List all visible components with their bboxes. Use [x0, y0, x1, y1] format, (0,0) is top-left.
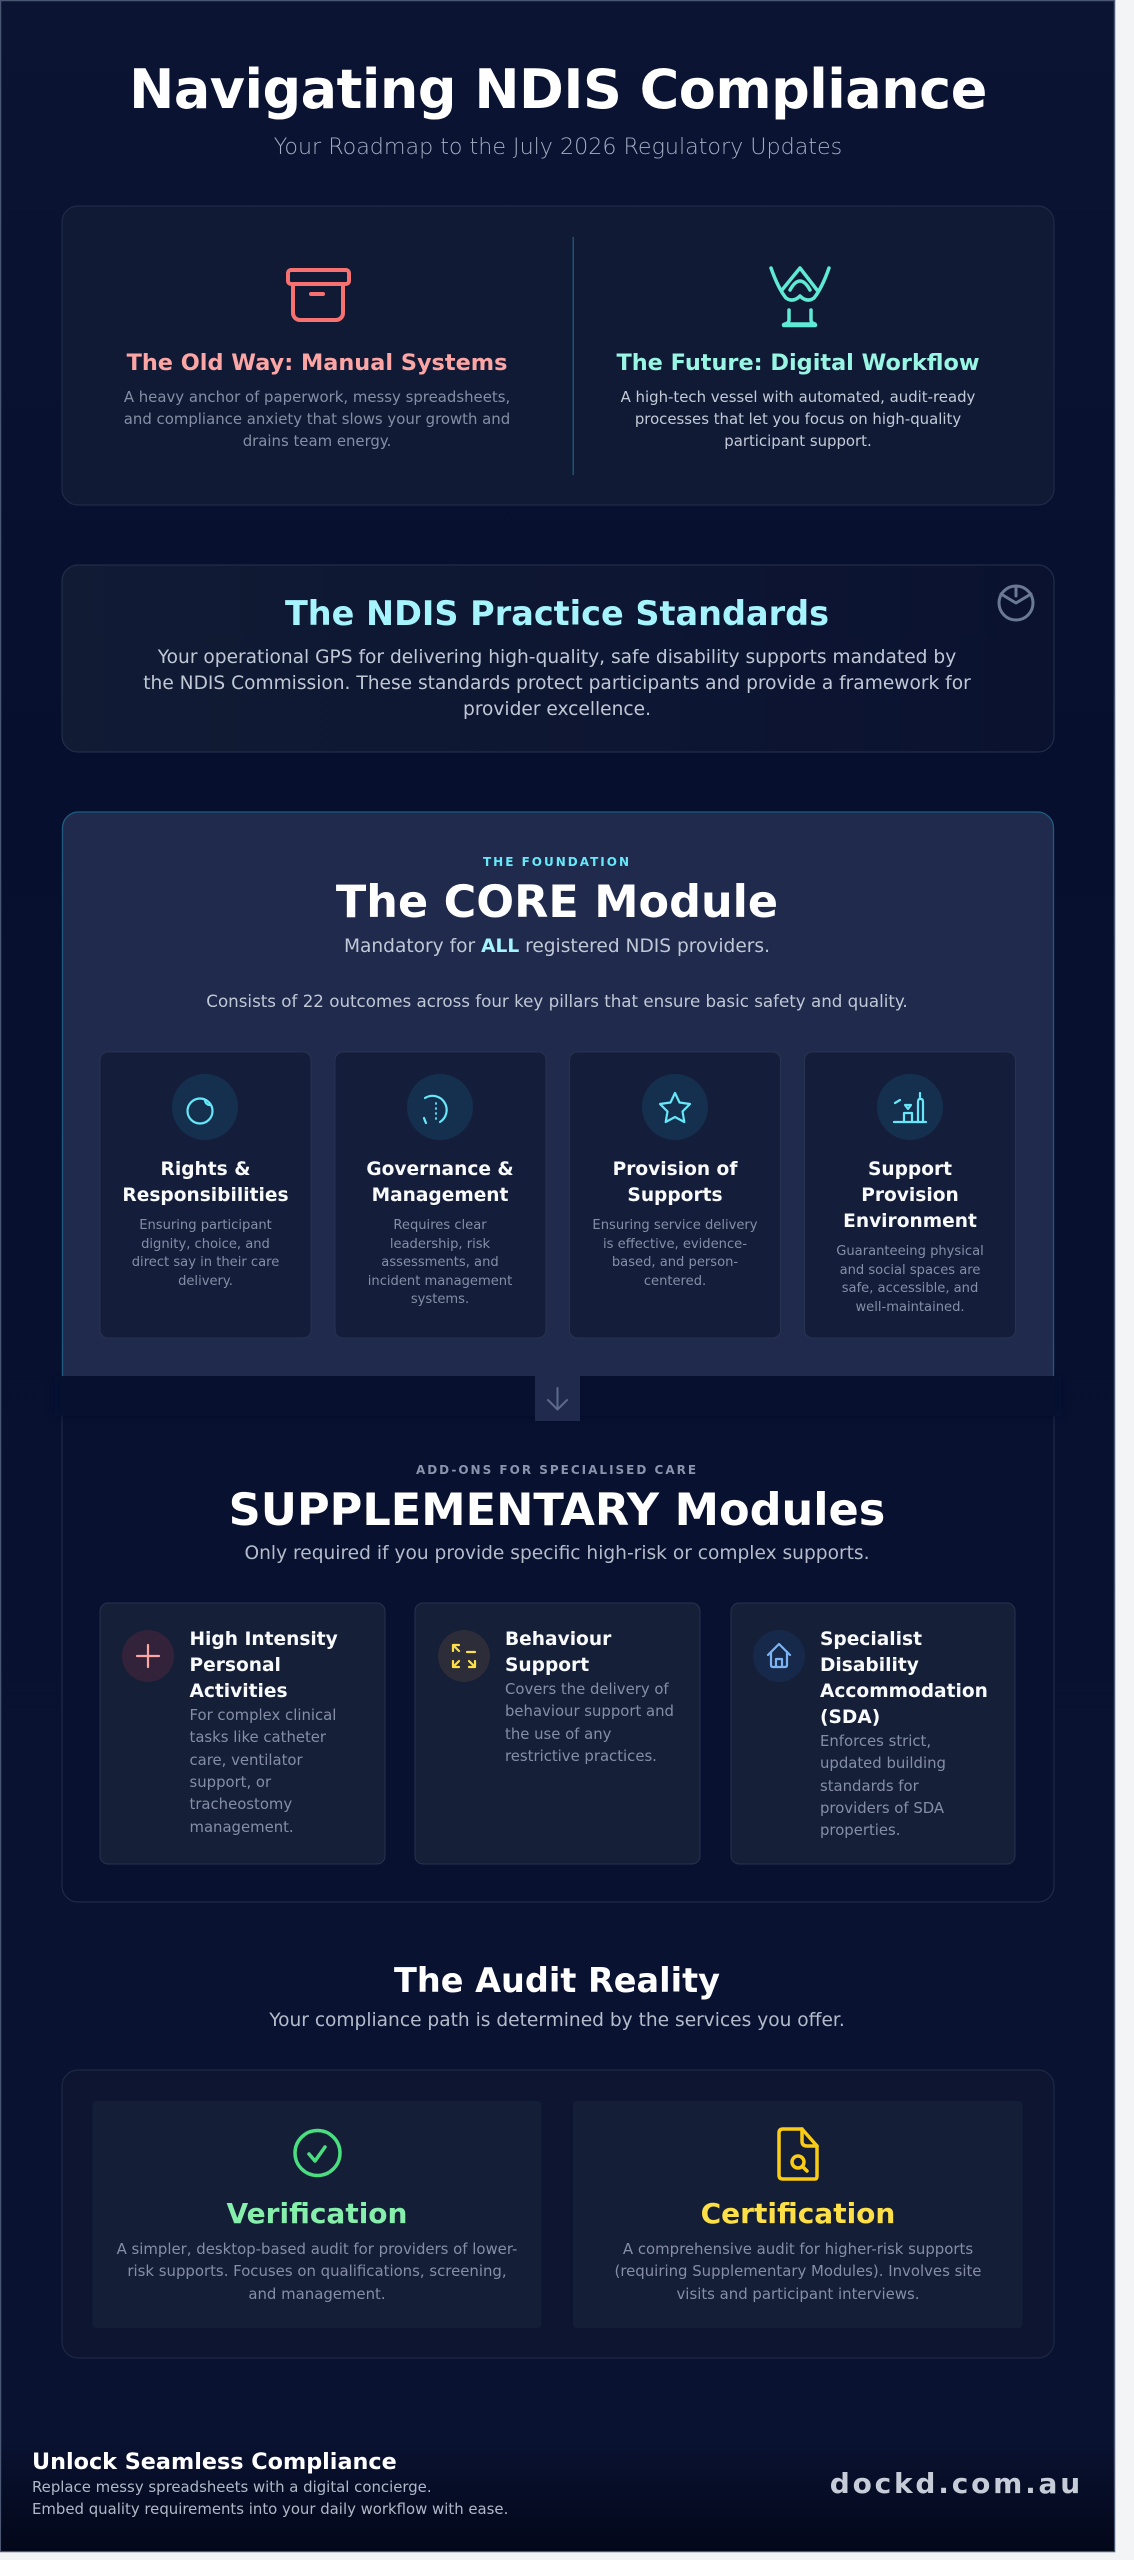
card: high intensity: Activities [190, 1681, 288, 1702]
icon: document search [779, 2129, 817, 2179]
card: verification: risk supports. Focuses on qualifications, screening, [127, 2262, 507, 2280]
card: governance [335, 1052, 546, 1338]
card: environment: Guaranteeing physical [836, 1244, 984, 1259]
old way column: A heavy anchor of paperwork, messy spreadsheets, [124, 388, 510, 406]
supplementary subtitle: Only required if you provide specific high-risk or complex supports. [245, 1543, 869, 1564]
card: specialist disability accommodation: standards for [820, 1777, 920, 1795]
card: verification: and management. [248, 2285, 386, 2303]
card: rights: Ensuring participant [139, 1218, 272, 1233]
card: governance: Governance & [366, 1159, 514, 1180]
card: provision: is effective, evidence- [603, 1237, 747, 1252]
card: behaviour support: Support [505, 1655, 589, 1676]
card: behaviour support: restrictive practices. [505, 1747, 657, 1765]
card: governance: Management [372, 1185, 509, 1206]
card: verification [92, 2101, 542, 2328]
future column: processes that let you focus on high-quality [635, 410, 961, 428]
card: certification: (requiring Supplementary Modules). Involves site [615, 2262, 981, 2280]
core subtitle: Mandatory for ALL registered NDIS providers. [344, 936, 770, 957]
card: environment: and social spaces are [840, 1263, 980, 1278]
card: provision: Provision of [613, 1159, 738, 1180]
card: high intensity: management. [190, 1818, 294, 1836]
audit subtitle: Your compliance path is determined by the services you offer. [268, 2010, 845, 2031]
panel: core module [62, 812, 1054, 1376]
future column: The Future: Digital Workflow [616, 350, 980, 376]
card: provision [570, 1052, 780, 1338]
card: high intensity: care, ventilator [190, 1751, 303, 1769]
card: rights: direct say in their care [132, 1255, 279, 1270]
strip over card top [55, 1376, 1061, 1416]
icon: compass gauge [999, 586, 1033, 620]
icon: star [660, 1093, 690, 1122]
icon: arrows [453, 1645, 475, 1667]
card: rights: Rights & [161, 1159, 250, 1180]
supplementary heading: SUPPLEMENTARY Modules [229, 1484, 885, 1536]
card: provision: Ensuring service delivery [592, 1218, 758, 1233]
old way column [124, 270, 510, 450]
card: verification: Verification [227, 2197, 407, 2230]
heading: audit reality: The Audit Reality [394, 1961, 720, 2000]
icon: governance [424, 1096, 447, 1123]
card: rights [100, 1052, 311, 1338]
icon: digital vessel [771, 268, 829, 325]
card: specialist disability accommodation: updated building [820, 1754, 946, 1772]
card: rights: dignity, choice, and [141, 1237, 270, 1252]
card: governance: assessments, and [381, 1255, 499, 1270]
core description: Consists of 22 outcomes across four key pillars that ensure basic safety and quality. [206, 991, 908, 1011]
panel: audit paths [62, 2070, 1054, 2358]
card: specialist disability accommodation [731, 1603, 1015, 1864]
card: behaviour support: the use of any [505, 1725, 612, 1743]
card: environment: well-maintained. [855, 1300, 965, 1315]
card: certification: Certification [701, 2197, 895, 2230]
icon: plus [137, 1645, 159, 1667]
card: certification [573, 2101, 1022, 2328]
future column: participant support. [724, 432, 872, 450]
card: governance: incident management [368, 1274, 512, 1289]
card: specialist disability accommodation: Disability [820, 1655, 919, 1676]
old way column: and compliance anxiety that slows your growth and [124, 410, 510, 428]
card: high intensity: tasks like catheter [190, 1728, 327, 1746]
card: certification: A comprehensive audit for higher-risk supports [623, 2240, 973, 2258]
panel: practice standards: Your operational GPS for delivering high-quality, safe disability supports mandated by [157, 647, 956, 668]
core label: THE FOUNDATION [483, 855, 631, 869]
icon: rights [188, 1098, 212, 1124]
footer brand: dockd.com.au [830, 2467, 1083, 2500]
footer call to action [32, 2449, 508, 2518]
subtitle: Your Roadmap to the July 2026 Regulatory Updates [274, 134, 842, 160]
card: high intensity: For complex clinical [190, 1706, 336, 1724]
icon: check circle [295, 2130, 340, 2176]
card: behaviour support: Behaviour [505, 1629, 612, 1650]
footer [1, 2440, 1114, 2551]
panel: practice standards: the NDIS Commission. These standards protect participants and provide a framework for [143, 673, 971, 694]
card: environment: Support [868, 1159, 952, 1180]
card: high intensity: Personal [190, 1655, 281, 1676]
title: Navigating NDIS Compliance [129, 58, 987, 121]
arrow connector [535, 1376, 580, 1421]
card: high intensity: tracheostomy [190, 1795, 292, 1813]
panel: practice standards [62, 565, 1054, 752]
footer call to action: Unlock Seamless Compliance [32, 2449, 397, 2475]
card: rights: delivery. [178, 1274, 233, 1289]
card: environment: Environment [843, 1211, 977, 1232]
supplementary label: ADD-ONS FOR SPECIALISED CARE [416, 1463, 698, 1477]
card: verification: A simpler, desktop-based audit for providers of lower- [117, 2240, 517, 2258]
card: provision: based, and person- [612, 1255, 738, 1270]
card: behaviour support: Covers the delivery of [505, 1680, 669, 1698]
card: rights: Responsibilities [122, 1185, 289, 1206]
card: governance: systems. [411, 1292, 469, 1307]
panel: old way vs future [62, 206, 1054, 505]
panel: practice standards: provider excellence. [463, 699, 651, 720]
footer call to action: Embed quality requirements into your daily workflow with ease. [32, 2500, 508, 2518]
icon: archive box [288, 270, 349, 320]
card: specialist disability accommodation: (SDA) [820, 1707, 880, 1728]
card: provision: centered. [644, 1274, 706, 1289]
card: environment [804, 1052, 1016, 1338]
card: certification: visits and participant interviews. [677, 2285, 919, 2303]
card: behaviour support: behaviour support and [505, 1702, 674, 1720]
panel: practice standards: The NDIS Practice Standards [285, 594, 829, 633]
card: provision: Supports [627, 1185, 723, 1206]
card: governance: Requires clear [393, 1218, 487, 1233]
card: specialist disability accommodation: properties. [820, 1821, 900, 1839]
card: governance: leadership, risk [390, 1237, 491, 1252]
old way column: drains team energy. [243, 432, 391, 450]
card: behaviour support [415, 1603, 700, 1864]
icon: house [768, 1644, 790, 1667]
card: environment: safe, accessible, and [842, 1281, 978, 1296]
card: high intensity [100, 1603, 385, 1864]
future column: A high-tech vessel with automated, audit-ready [621, 388, 976, 406]
footer call to action: Replace messy spreadsheets with a digital concierge. [32, 2478, 432, 2496]
card: high intensity: High Intensity [190, 1629, 338, 1650]
card: high intensity: support, or [190, 1773, 272, 1791]
icon: environment [894, 1093, 926, 1122]
card: specialist disability accommodation: Specialist [820, 1629, 922, 1650]
card: specialist disability accommodation: Accommodation [820, 1681, 988, 1702]
old way column: The Old Way: Manual Systems [127, 350, 507, 376]
card: specialist disability accommodation: providers of SDA [820, 1799, 945, 1817]
card: environment: Provision [861, 1185, 959, 1206]
core heading: The CORE Module [336, 877, 778, 928]
card: specialist disability accommodation: Enforces strict, [820, 1732, 931, 1750]
panel: supplementary modules [55, 1376, 1061, 1902]
future column [616, 268, 980, 450]
